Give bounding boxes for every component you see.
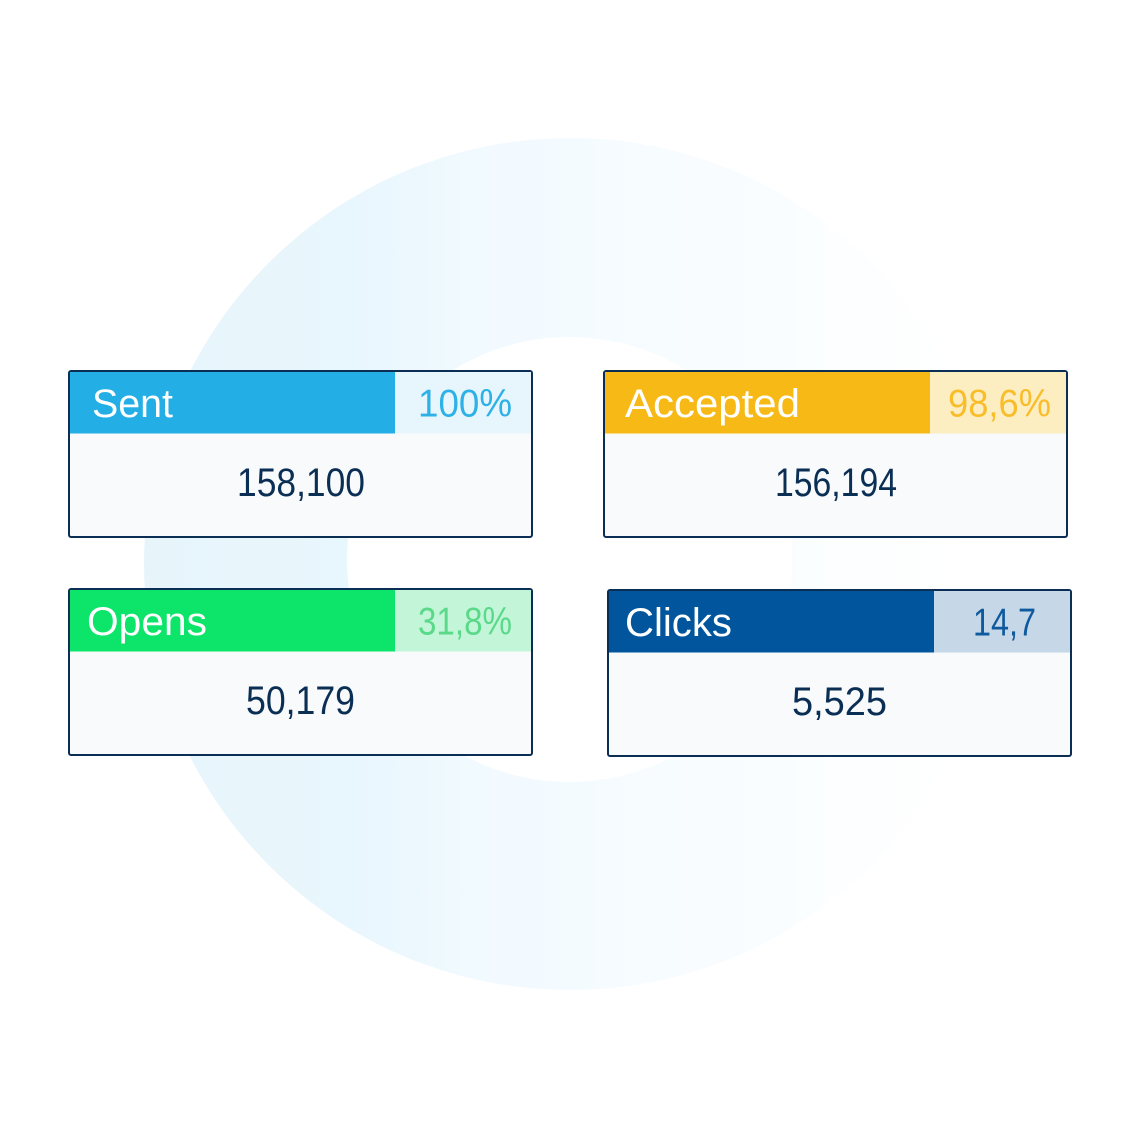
label bar: Sent [70,372,395,434]
percent background: Accepted [930,372,1066,434]
percent: Sent: 100% [418,382,512,426]
label: Clicks: Clicks [625,601,732,645]
value: Clicks: 5,525 [792,680,887,724]
percent background: Sent [395,372,531,434]
percent background: Clicks [934,591,1070,652]
label: Accepted: Accepted [625,382,800,426]
label bar: Accepted [605,372,930,434]
percent: Clicks: 14,7 [973,602,1036,644]
label bar: Clicks [609,591,934,652]
percent background: Opens [395,590,531,652]
background ring [144,138,996,990]
percent: Accepted: 98,6% [948,382,1051,426]
panel: Clicks [608,590,1071,756]
value: Sent: 158,100 [237,461,365,505]
label: Sent: Sent [92,382,173,426]
percent: Opens: 31,8% [418,600,512,644]
value: Opens: 50,179 [246,679,355,723]
panel: Opens [69,589,532,755]
panel: Accepted [604,371,1067,537]
label: Opens: Opens [87,600,207,644]
panel: Sent [69,371,532,537]
value: Accepted: 156,194 [775,461,897,505]
label bar: Opens [70,590,395,652]
